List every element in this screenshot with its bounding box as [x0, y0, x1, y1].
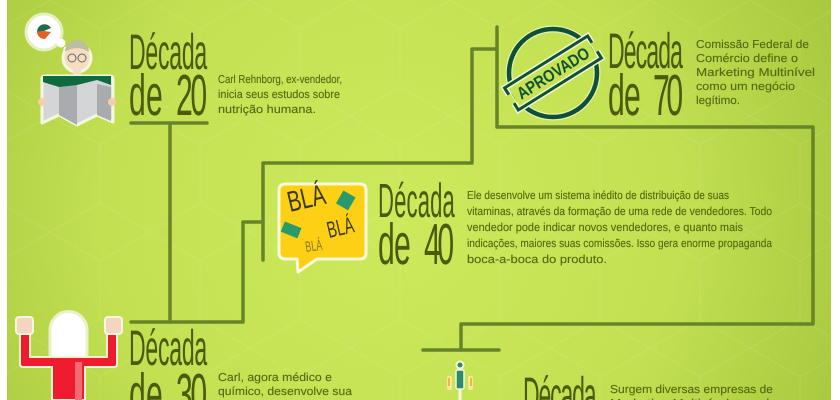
text: decade 30: químico, desenvolve sua: [218, 386, 353, 398]
text: decade 40: vendedor pode indicar novos vendedores, e quanto mais: [467, 222, 743, 234]
icon: approved stamp: APROVADO: [513, 44, 593, 103]
icon: speech bubble BLÁ: BLÁ: [284, 178, 329, 219]
text: decade 20: nutrição humana.: [218, 104, 316, 116]
heading: Década de 40: Década: [378, 175, 455, 228]
text: decade 40: vitaminas, através da formação de uma rede de vendedores. Todo: [467, 206, 772, 218]
heading: Década de 70: Década: [608, 23, 683, 79]
heading: Década de 70: de: [608, 63, 641, 128]
heading: Década de 20: [129, 24, 207, 128]
text: next decade: [610, 384, 788, 400]
heading: Década de 40: de: [378, 212, 411, 277]
text: decade 70: Comissão Federal de: [696, 39, 809, 51]
heading: Década de 70: [608, 23, 683, 128]
heading: Década de 20: 20: [176, 63, 207, 128]
timeline connector: [131, 27, 813, 350]
heading: Década de 20: Década: [129, 24, 207, 80]
text: decade 20: Carl Rehnborg, ex-vendedor,: [218, 74, 342, 86]
text: decade 30: [218, 372, 353, 398]
text: decade 20: inicia seus estudos sobre: [218, 89, 340, 101]
heading: Década de 40: [378, 175, 455, 277]
icon: man with map and thought bubble: [26, 14, 116, 125]
heading: Década de 40: 40: [424, 212, 454, 277]
text: decade 70: [696, 39, 815, 107]
icon: man in red shirt with raised arms: [16, 312, 122, 400]
icon: speech bubble BLÁ: [279, 178, 366, 272]
text: decade 40: indicações, maiores suas comissões. Isso gera enorme propaganda: [467, 238, 773, 250]
heading: Década de 30: [129, 320, 207, 400]
text: next decade: Surgem diversas empresas de: [610, 384, 773, 396]
panel: decade 30: [16, 312, 353, 400]
text: decade 70: Marketing Multinível: [696, 67, 815, 79]
heading: Década de 20: de: [129, 63, 163, 128]
text: decade 40: boca-a-boca do produto.: [467, 254, 607, 266]
icon: speech bubble BLÁ: BLÁ: [304, 236, 323, 256]
icon: figure with yellow arrows: [447, 362, 473, 400]
panel: next decade: [447, 362, 788, 400]
panel: decade 40: [279, 175, 773, 277]
heading: Década de 70: 70: [653, 63, 683, 128]
text: decade 40: Ele desenvolve um sistema inédito de distribuição de suas: [467, 190, 729, 202]
text: decade 30: Carl, agora médico e: [218, 372, 332, 384]
text: decade 70: legítimo.: [696, 95, 740, 107]
text: decade 40: [467, 190, 773, 266]
text: decade 70: Comércio define o: [696, 53, 798, 65]
text: decade 70: como um negócio: [696, 81, 795, 93]
panel: decade 70: [505, 23, 815, 128]
panel: decade 20: [26, 14, 342, 128]
heading: Década de 30: Década: [129, 320, 207, 376]
text: decade 20: [218, 74, 342, 116]
icon: speech bubble BLÁ: BLÁ: [324, 211, 357, 243]
icon: approved stamp: [505, 29, 601, 117]
